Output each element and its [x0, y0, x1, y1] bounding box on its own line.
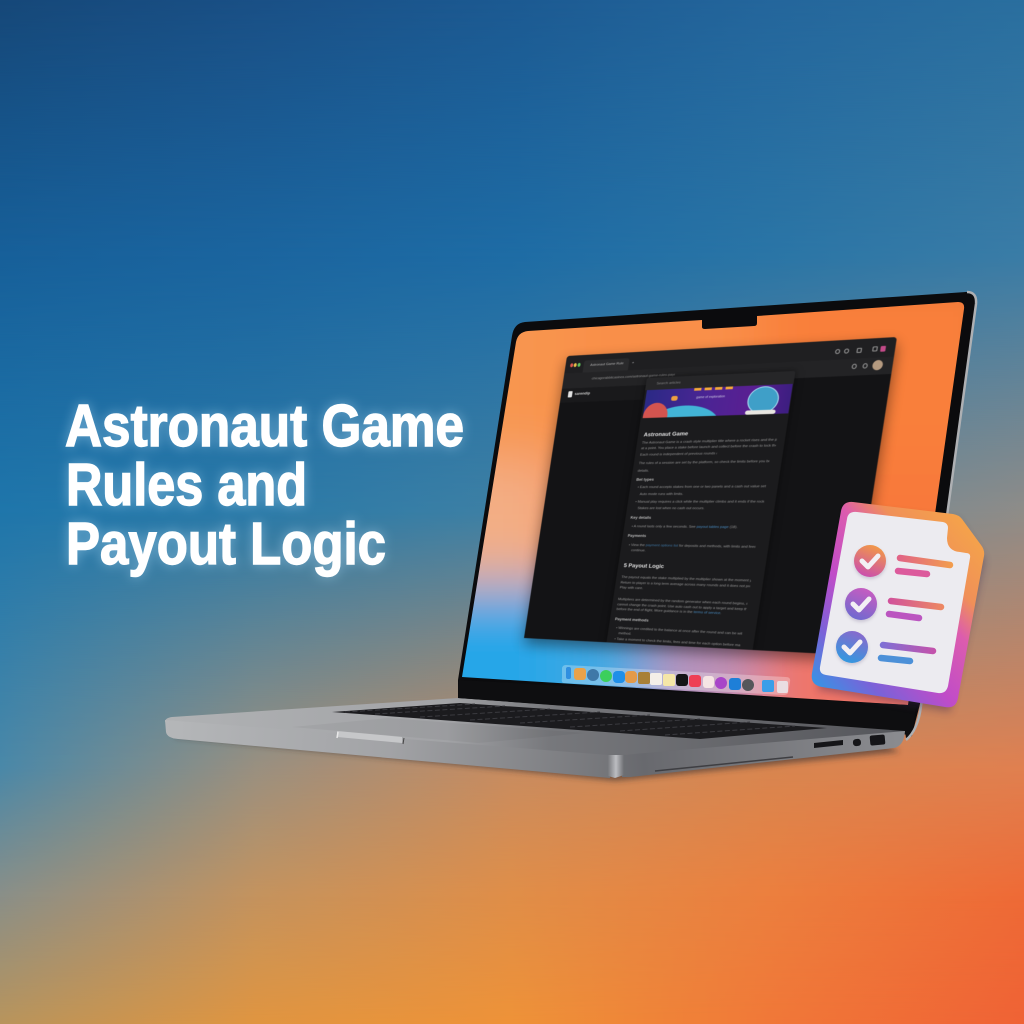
trackpad — [292, 718, 585, 743]
article column: • A round lasts only a few seconds. See payout tables page (18). — [631, 525, 738, 529]
article column: 5 Payout Logic — [623, 562, 664, 569]
title: Payout Logic — [66, 511, 386, 577]
dock icons — [566, 667, 788, 693]
laptop keyboard base — [165, 680, 921, 778]
checklist document icon — [812, 502, 985, 712]
tab strip — [564, 337, 897, 374]
article column: Bet types — [636, 477, 654, 482]
article column: Payments — [627, 534, 646, 538]
article banner — [643, 384, 793, 418]
title: Rules and — [66, 452, 307, 518]
article column: method. — [618, 631, 632, 636]
laptop screen wallpaper — [462, 302, 964, 705]
search field: Search articles — [656, 381, 681, 385]
browser shadow — [524, 343, 897, 661]
sidebar logo: sarendip — [574, 391, 590, 396]
article column: Key details — [630, 515, 651, 520]
dock — [562, 665, 790, 695]
article column: Play with care. — [620, 586, 643, 590]
laptop — [165, 290, 978, 785]
article column: Stakes are lost when no cash out occurs. — [637, 506, 705, 510]
article column: continue. — [631, 549, 646, 552]
laptop lid — [458, 292, 976, 735]
article column: Payment methods — [615, 617, 649, 623]
sidebar logo — [560, 385, 645, 403]
article column: details. — [637, 469, 649, 473]
article column: Auto mode runs with limits. — [639, 492, 683, 496]
title: Astronaut Game — [65, 393, 464, 459]
checklist row 2 — [845, 588, 941, 622]
search field — [645, 371, 796, 390]
article column — [606, 371, 796, 650]
laptop ground shadow — [175, 728, 900, 781]
checklist row 1 — [854, 545, 950, 579]
ports — [814, 734, 885, 748]
tab strip: + — [632, 361, 634, 365]
article banner: game of exploration — [696, 395, 725, 399]
article text: Astronaut Game — [643, 431, 689, 438]
checklist row 3 — [836, 631, 933, 665]
keyboard — [332, 703, 827, 739]
address bar — [562, 357, 894, 389]
front notch marks — [337, 732, 338, 738]
article column: before the end of flight. More guidance is in the terms of service. — [616, 607, 722, 615]
browser window — [524, 337, 897, 655]
